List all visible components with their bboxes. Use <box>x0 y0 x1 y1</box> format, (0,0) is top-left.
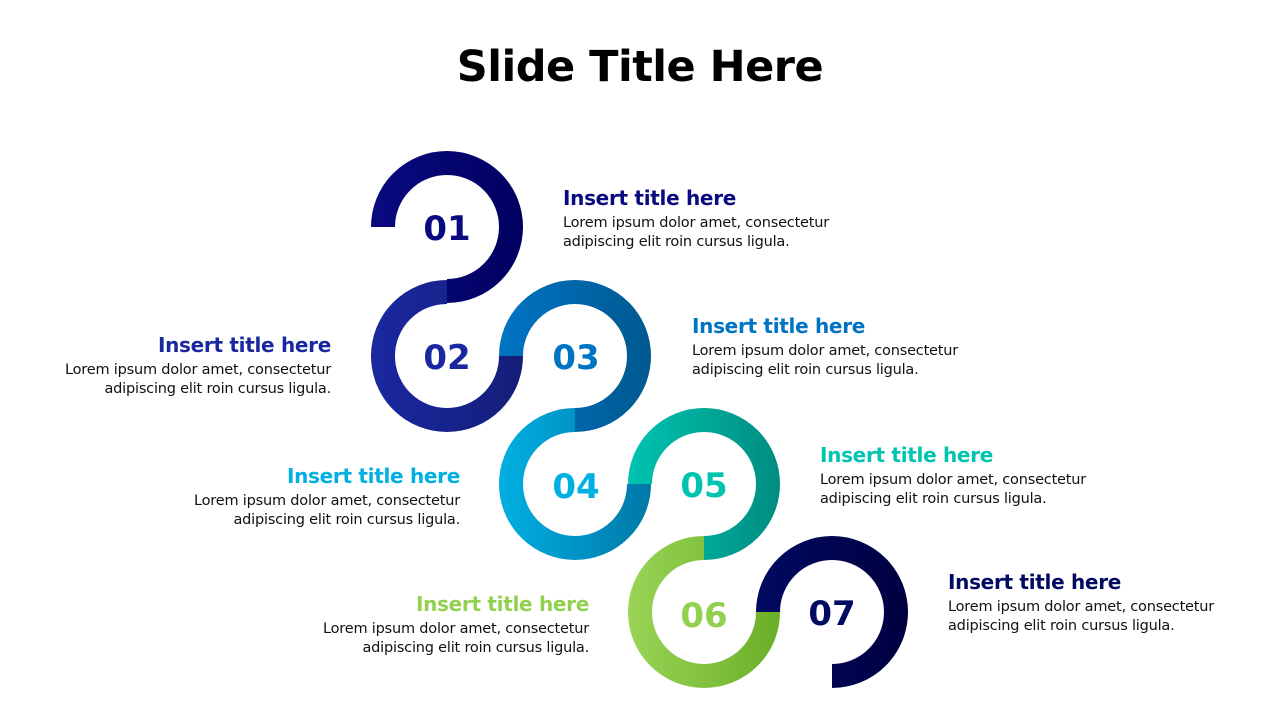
text 04 <box>194 464 460 528</box>
text 03: Lorem ipsum dolor amet, consectetur <box>692 343 958 359</box>
ring 01 <box>383 163 511 291</box>
text 06 <box>323 592 590 656</box>
text 07: Insert title here <box>948 570 1121 594</box>
text 01 <box>563 186 830 250</box>
ring 07 <box>768 548 896 676</box>
number 05: 05 <box>680 466 728 506</box>
text 06: adipiscing elit roin cursus ligula. <box>362 640 589 656</box>
text 07: adipiscing elit roin cursus ligula. <box>948 618 1175 634</box>
text 07 <box>948 570 1214 634</box>
title: Slide Title Here <box>457 42 823 92</box>
number 07: 07 <box>808 594 856 634</box>
text 01: Lorem ipsum dolor amet, consectetur <box>563 215 829 231</box>
text 03 <box>692 314 958 378</box>
ring 04 <box>511 420 639 548</box>
text 06: Insert title here <box>416 592 589 616</box>
text 03: Insert title here <box>692 314 865 338</box>
text 02: adipiscing elit roin cursus ligula. <box>104 381 331 397</box>
text 05 <box>820 443 1086 507</box>
ring 03 <box>511 292 639 420</box>
number 02: 02 <box>423 338 471 378</box>
text 02 <box>65 333 332 397</box>
text 02: Lorem ipsum dolor amet, consectetur <box>65 362 331 378</box>
text 05: Insert title here <box>820 443 993 467</box>
ring 02 <box>383 292 511 420</box>
text 04: Lorem ipsum dolor amet, consectetur <box>194 493 460 509</box>
number 01: 01 <box>423 209 471 249</box>
text 02: Insert title here <box>158 333 331 357</box>
text 07: Lorem ipsum dolor amet, consectetur <box>948 599 1214 615</box>
text 05: Lorem ipsum dolor amet, consectetur <box>820 472 1086 488</box>
text 04: Insert title here <box>287 464 460 488</box>
text 06: Lorem ipsum dolor amet, consectetur <box>323 621 589 637</box>
text 05: adipiscing elit roin cursus ligula. <box>820 491 1047 507</box>
text 04: adipiscing elit roin cursus ligula. <box>233 512 460 528</box>
text 03: adipiscing elit roin cursus ligula. <box>692 362 919 378</box>
number 04: 04 <box>552 467 600 507</box>
ring 06 <box>640 548 768 676</box>
text 01: adipiscing elit roin cursus ligula. <box>563 234 790 250</box>
number 03: 03 <box>552 338 600 378</box>
text 01: Insert title here <box>563 186 736 210</box>
ring 05 <box>640 420 768 548</box>
number 06: 06 <box>680 596 728 636</box>
